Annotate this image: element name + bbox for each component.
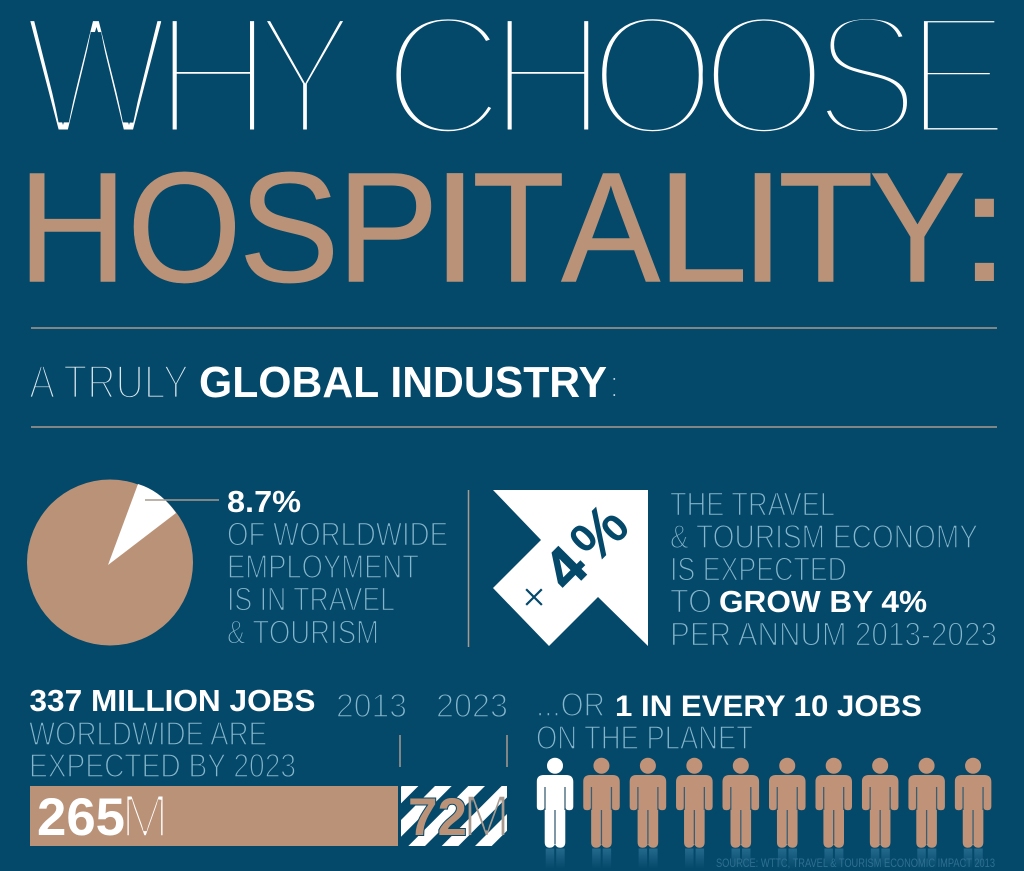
text: 8.7% of worldwide employment: & TOURISM bbox=[227, 614, 379, 652]
text: 8.7% of worldwide employment: IS IN TRAVEL bbox=[227, 582, 395, 618]
bar: 72M striped: 72 bbox=[408, 788, 467, 847]
icon: white person bbox=[537, 758, 573, 868]
text: travel and tourism growth bbox=[670, 486, 997, 654]
heading: a truly global industry: A TRULY bbox=[29, 355, 189, 408]
icon: tan people row bbox=[583, 758, 991, 868]
heading: a truly global industry: GLOBAL INDUSTRY bbox=[199, 359, 607, 407]
title: hospitality: S bbox=[239, 139, 340, 315]
year labels bbox=[336, 688, 508, 767]
title: hospitality: O bbox=[127, 140, 242, 316]
title: hospitality: I bbox=[431, 139, 479, 315]
text: 8.7% of worldwide employment bbox=[227, 485, 448, 652]
heading: a truly global industry bbox=[29, 355, 620, 408]
arrow: +4% growth: 4 bbox=[531, 534, 600, 603]
text: 337 million jobs: WORLDWIDE ARE bbox=[29, 716, 267, 753]
text: 1 in every 10 jobs: 1 IN EVERY 10 JOBS bbox=[615, 690, 922, 723]
text: 337 million jobs: 337 MILLION JOBS bbox=[30, 684, 316, 718]
year labels: 2023 bbox=[436, 688, 508, 725]
arrow: +4% growth: % bbox=[558, 492, 641, 575]
text: 1 in every 10 jobs: ON THE PLANET bbox=[536, 720, 753, 757]
title: hospitality: P bbox=[336, 139, 439, 315]
pie chart: 8.7% of employment bbox=[27, 480, 219, 646]
text: 8.7% of worldwide employment: EMPLOYMENT bbox=[227, 549, 419, 586]
arrow: +4% growth bbox=[493, 490, 648, 646]
text: travel and tourism growth: TO bbox=[670, 584, 712, 620]
title: hospitality bbox=[18, 139, 1007, 316]
title: hospitality: I bbox=[740, 140, 785, 315]
arrow: +4% growth: + bbox=[506, 569, 563, 626]
text: 8.7% of worldwide employment: OF WORLDWIDE bbox=[227, 516, 448, 554]
heading: a truly global industry: : bbox=[609, 364, 620, 406]
text: 8.7% of worldwide employment: 8.7% bbox=[227, 485, 301, 519]
title: hospitality: A bbox=[561, 140, 660, 315]
bar: 265M bbox=[30, 782, 398, 850]
text: 337 million jobs bbox=[29, 684, 316, 785]
year labels: 2013 bbox=[336, 688, 407, 725]
title: hospitality: H bbox=[18, 139, 127, 315]
text: travel and tourism growth: THE TRAVEL bbox=[670, 486, 835, 524]
bar: 72M striped bbox=[401, 786, 507, 846]
text: 1 in every 10 jobs bbox=[536, 687, 922, 757]
text: travel and tourism growth: GROW BY 4% bbox=[719, 585, 927, 619]
bar: 72M striped: M bbox=[463, 784, 510, 849]
text: travel and tourism growth: IS EXPECTED bbox=[670, 552, 847, 588]
people icons: 1 in 10 bbox=[537, 758, 991, 868]
text: 1 in every 10 jobs: ...OR bbox=[536, 687, 605, 724]
bar: 265M: 265 bbox=[37, 788, 125, 847]
bar: 265M: M bbox=[121, 782, 169, 850]
title: why choose bbox=[22, 0, 1009, 174]
title: hospitality: T bbox=[778, 140, 874, 316]
title: hospitality: L bbox=[656, 140, 748, 316]
title: hospitality: : bbox=[962, 144, 1007, 312]
title: hospitality: T bbox=[472, 139, 565, 315]
text: 337 million jobs: EXPECTED BY 2023 bbox=[29, 748, 296, 785]
title: hospitality: Y bbox=[869, 140, 966, 316]
